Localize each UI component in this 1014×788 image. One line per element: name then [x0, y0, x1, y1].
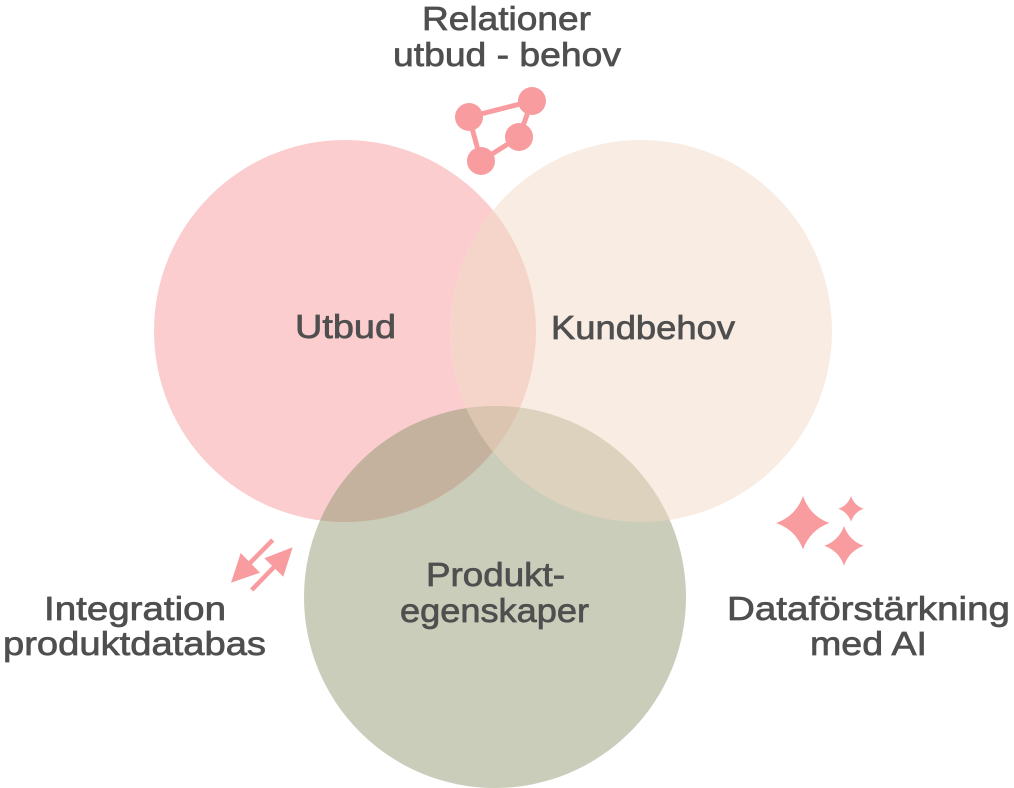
heading: Relationer utbud - behov: utbud - behov	[393, 36, 622, 73]
label: Produktegenskaper: Produkt-	[426, 556, 565, 593]
label: Dataförstärkning med AI: med AI	[810, 625, 927, 662]
label: Kundbehov: Kundbehov	[551, 309, 736, 346]
label: Produktegenskaper	[400, 556, 589, 629]
label: Integration produktdatabas	[3, 590, 266, 662]
circle: Produktegenskaper	[304, 406, 686, 788]
label: Utbud: Utbud	[295, 308, 396, 345]
heading: Relationer utbud - behov: Relationer	[422, 0, 591, 37]
label: Integration produktdatabas: produktdatabas	[3, 625, 266, 662]
circle: Kundbehov	[450, 140, 832, 522]
heading: Relationer utbud - behov	[393, 0, 622, 73]
label: Dataförstärkning med AI	[727, 590, 1010, 662]
overlap: all three	[466, 406, 520, 452]
overlap: Kundbehov and Produktegenskaper	[493, 408, 670, 522]
overlap: Utbud and Kundbehov	[450, 210, 536, 408]
icon: sparkles	[776, 496, 864, 566]
label: Dataförstärkning med AI: Dataförstärkning	[727, 590, 1010, 627]
icon: two opposing arrows	[231, 540, 293, 590]
overlap: Utbud and Produktegenskaper	[320, 408, 493, 522]
label: Integration produktdatabas: Integration	[44, 590, 226, 627]
circle: Utbud	[154, 140, 536, 522]
icon: network nodes	[455, 87, 546, 175]
label: Produktegenskaper: egenskaper	[400, 592, 589, 629]
venn diagram	[154, 140, 832, 788]
